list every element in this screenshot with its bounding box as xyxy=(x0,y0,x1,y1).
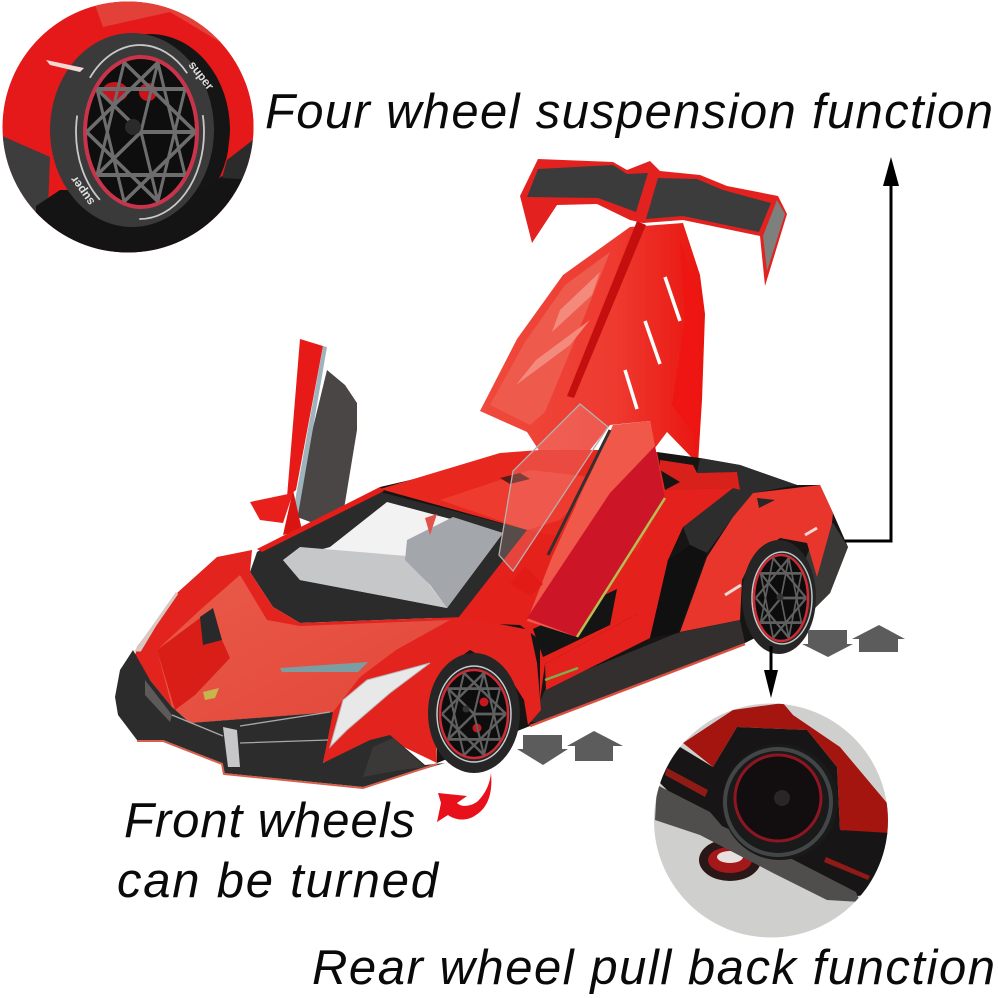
body highlight xyxy=(95,2,222,43)
label: front wheels xyxy=(117,794,440,908)
car: a-pillar xyxy=(257,487,384,552)
arrow: pointer to pull back close-up xyxy=(764,646,778,698)
panel: suspension wheel close-up: super xyxy=(67,173,97,208)
car: engine deck frame xyxy=(660,460,740,490)
car: front splitter and grille xyxy=(115,650,445,788)
car: left headlight xyxy=(137,593,177,650)
red underbody stripe xyxy=(824,857,870,880)
car: right headlight xyxy=(330,663,430,747)
car: side body under door xyxy=(455,488,733,700)
car: sill xyxy=(530,620,745,726)
car: front wheel xyxy=(428,653,520,773)
car: windshield glass xyxy=(283,502,503,608)
car: front fender and body sides xyxy=(127,550,541,763)
rim xyxy=(85,57,197,207)
wheel arch shadow xyxy=(144,34,230,190)
main wheel xyxy=(722,744,838,860)
arrow: red steering curve xyxy=(437,773,491,822)
car: rear wing xyxy=(520,159,787,286)
red body xyxy=(683,703,890,835)
small front wheel xyxy=(699,839,761,881)
ground shadow xyxy=(36,176,243,252)
car: windshield frame xyxy=(250,492,527,623)
car: rear haunch xyxy=(680,485,833,632)
car: left open door xyxy=(250,339,357,535)
heading: four wheel suspension: Four wheel suspension function xyxy=(265,85,993,139)
panel: pull back close-up xyxy=(650,700,895,945)
grey chassis xyxy=(655,785,860,902)
car: open door window xyxy=(499,404,608,571)
tyre white line xyxy=(76,45,204,219)
left sill panel xyxy=(0,135,50,216)
right side body xyxy=(228,81,254,150)
car: door mirror xyxy=(510,566,543,596)
car: body base xyxy=(257,450,848,763)
car: rear wheel xyxy=(742,540,816,654)
dark underbody xyxy=(660,727,890,897)
arrows: rear wheel up and down xyxy=(802,625,905,657)
car: hood xyxy=(157,575,450,723)
tyre xyxy=(50,33,214,227)
red body stripe xyxy=(665,768,708,797)
label: front wheels: Front wheels xyxy=(124,794,415,848)
car: deck and roof xyxy=(380,450,733,554)
body accent xyxy=(46,60,84,72)
side mesh grille xyxy=(222,140,253,179)
label: rear wheel pull back: Rear wheel pull back function xyxy=(312,941,995,995)
car: raised engine lid xyxy=(480,221,705,464)
car: black mesh intake xyxy=(683,458,797,553)
car: scissor door xyxy=(527,421,665,637)
tyre lettering: super xyxy=(186,58,217,93)
arrow: suspension pointer xyxy=(808,157,899,541)
car: rear bumper xyxy=(805,523,848,608)
label: front wheels: can be turned xyxy=(117,854,440,908)
arrows: front wheel up and down xyxy=(517,731,623,765)
panel: suspension wheel close-up xyxy=(0,0,256,256)
